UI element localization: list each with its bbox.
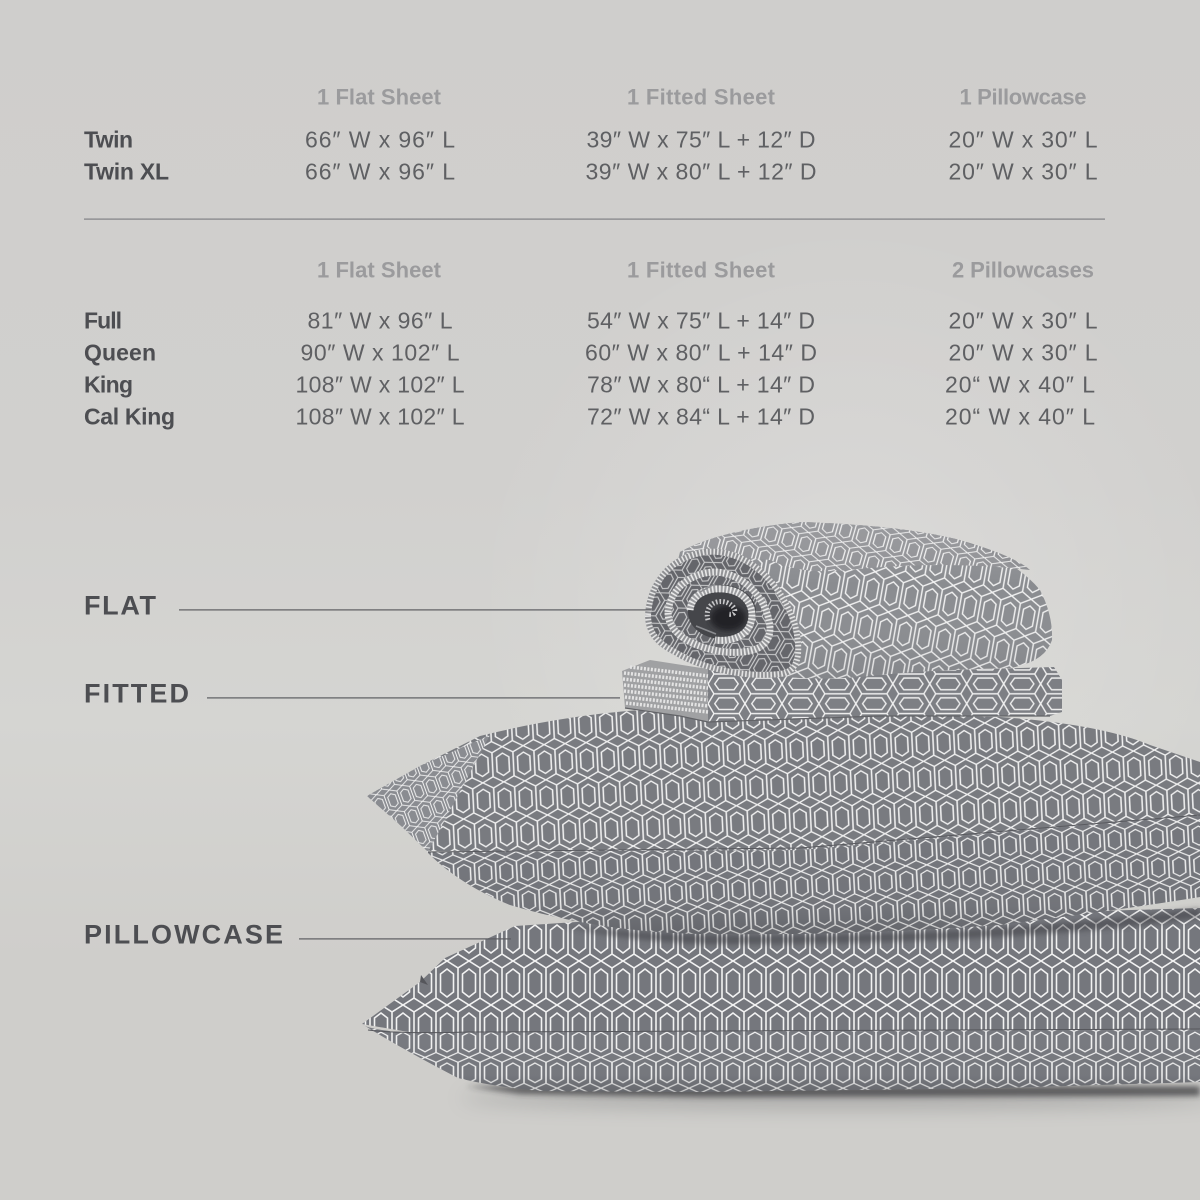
product stack photo illustration	[362, 522, 1200, 1107]
row: Full: 81″ W x 96″ L	[308, 308, 453, 334]
table: twin sizes	[84, 84, 1098, 184]
row: Cal King: 72″ W x 84“ L + 14″ D	[587, 404, 815, 430]
row: Cal King: 108″ W x 102″ L	[296, 404, 465, 430]
row: Cal King: Cal King	[84, 404, 175, 430]
column headings: 1 Fitted Sheet	[627, 258, 776, 282]
row: Queen	[84, 340, 1098, 366]
row: Queen: Queen	[84, 340, 156, 366]
row: Twin: Twin	[84, 126, 133, 152]
column headings	[317, 258, 1094, 282]
column headings: 1 Fitted Sheet	[627, 84, 776, 110]
callout: flat: FLAT	[84, 590, 156, 620]
row: King: 20“ W x 40″ L	[945, 372, 1095, 398]
bottom pillow	[362, 908, 1200, 1092]
row: Twin XL: 39″ W x 80″ L + 12″ D	[586, 158, 816, 184]
upper pillow	[367, 710, 1200, 944]
row: Full: 20″ W x 30″ L	[948, 308, 1098, 334]
row: King: 78″ W x 80“ L + 14″ D	[587, 372, 815, 398]
column headings: 1 Flat Sheet	[317, 258, 442, 282]
row: Full: Full	[84, 308, 122, 334]
row: Twin XL: 20″ W x 30″ L	[948, 158, 1098, 184]
flat sheet rolled	[648, 522, 1052, 679]
row: Full: 54″ W x 75″ L + 14″ D	[587, 308, 815, 334]
row: Twin	[84, 126, 1098, 152]
row: Twin: 39″ W x 75″ L + 12″ D	[586, 126, 816, 152]
row: Twin: 20″ W x 30″ L	[948, 126, 1098, 152]
row: Twin XL: 66″ W x 96″ L	[305, 158, 455, 184]
roll end spiral	[648, 552, 798, 675]
row: Cal King	[84, 404, 1095, 430]
row: Queen: 60″ W x 80″ L + 14″ D	[585, 340, 817, 366]
row: King	[84, 372, 1095, 398]
column headings: 1 Flat Sheet	[317, 84, 442, 110]
row: Full	[84, 308, 1098, 334]
column headings: 2 Pillowcases	[952, 258, 1094, 282]
row: Cal King: 20“ W x 40″ L	[945, 404, 1095, 430]
callout: fitted: FITTED	[84, 678, 189, 708]
row: King: King	[84, 372, 133, 398]
fitted sheet folded	[622, 660, 1062, 722]
row: Twin: 66″ W x 96″ L	[305, 126, 455, 152]
table: full to cal king sizes	[84, 258, 1098, 430]
row: Queen: 90″ W x 102″ L	[300, 340, 460, 366]
row: Twin XL	[84, 158, 1098, 184]
row: Twin XL: Twin XL	[84, 158, 169, 184]
row: Queen: 20″ W x 30″ L	[948, 340, 1098, 366]
callout: pillowcase: PILLOWCASE	[84, 920, 283, 950]
row: King: 108″ W x 102″ L	[296, 372, 465, 398]
column headings	[317, 84, 1086, 110]
column headings: 1 Pillowcase	[960, 84, 1086, 110]
